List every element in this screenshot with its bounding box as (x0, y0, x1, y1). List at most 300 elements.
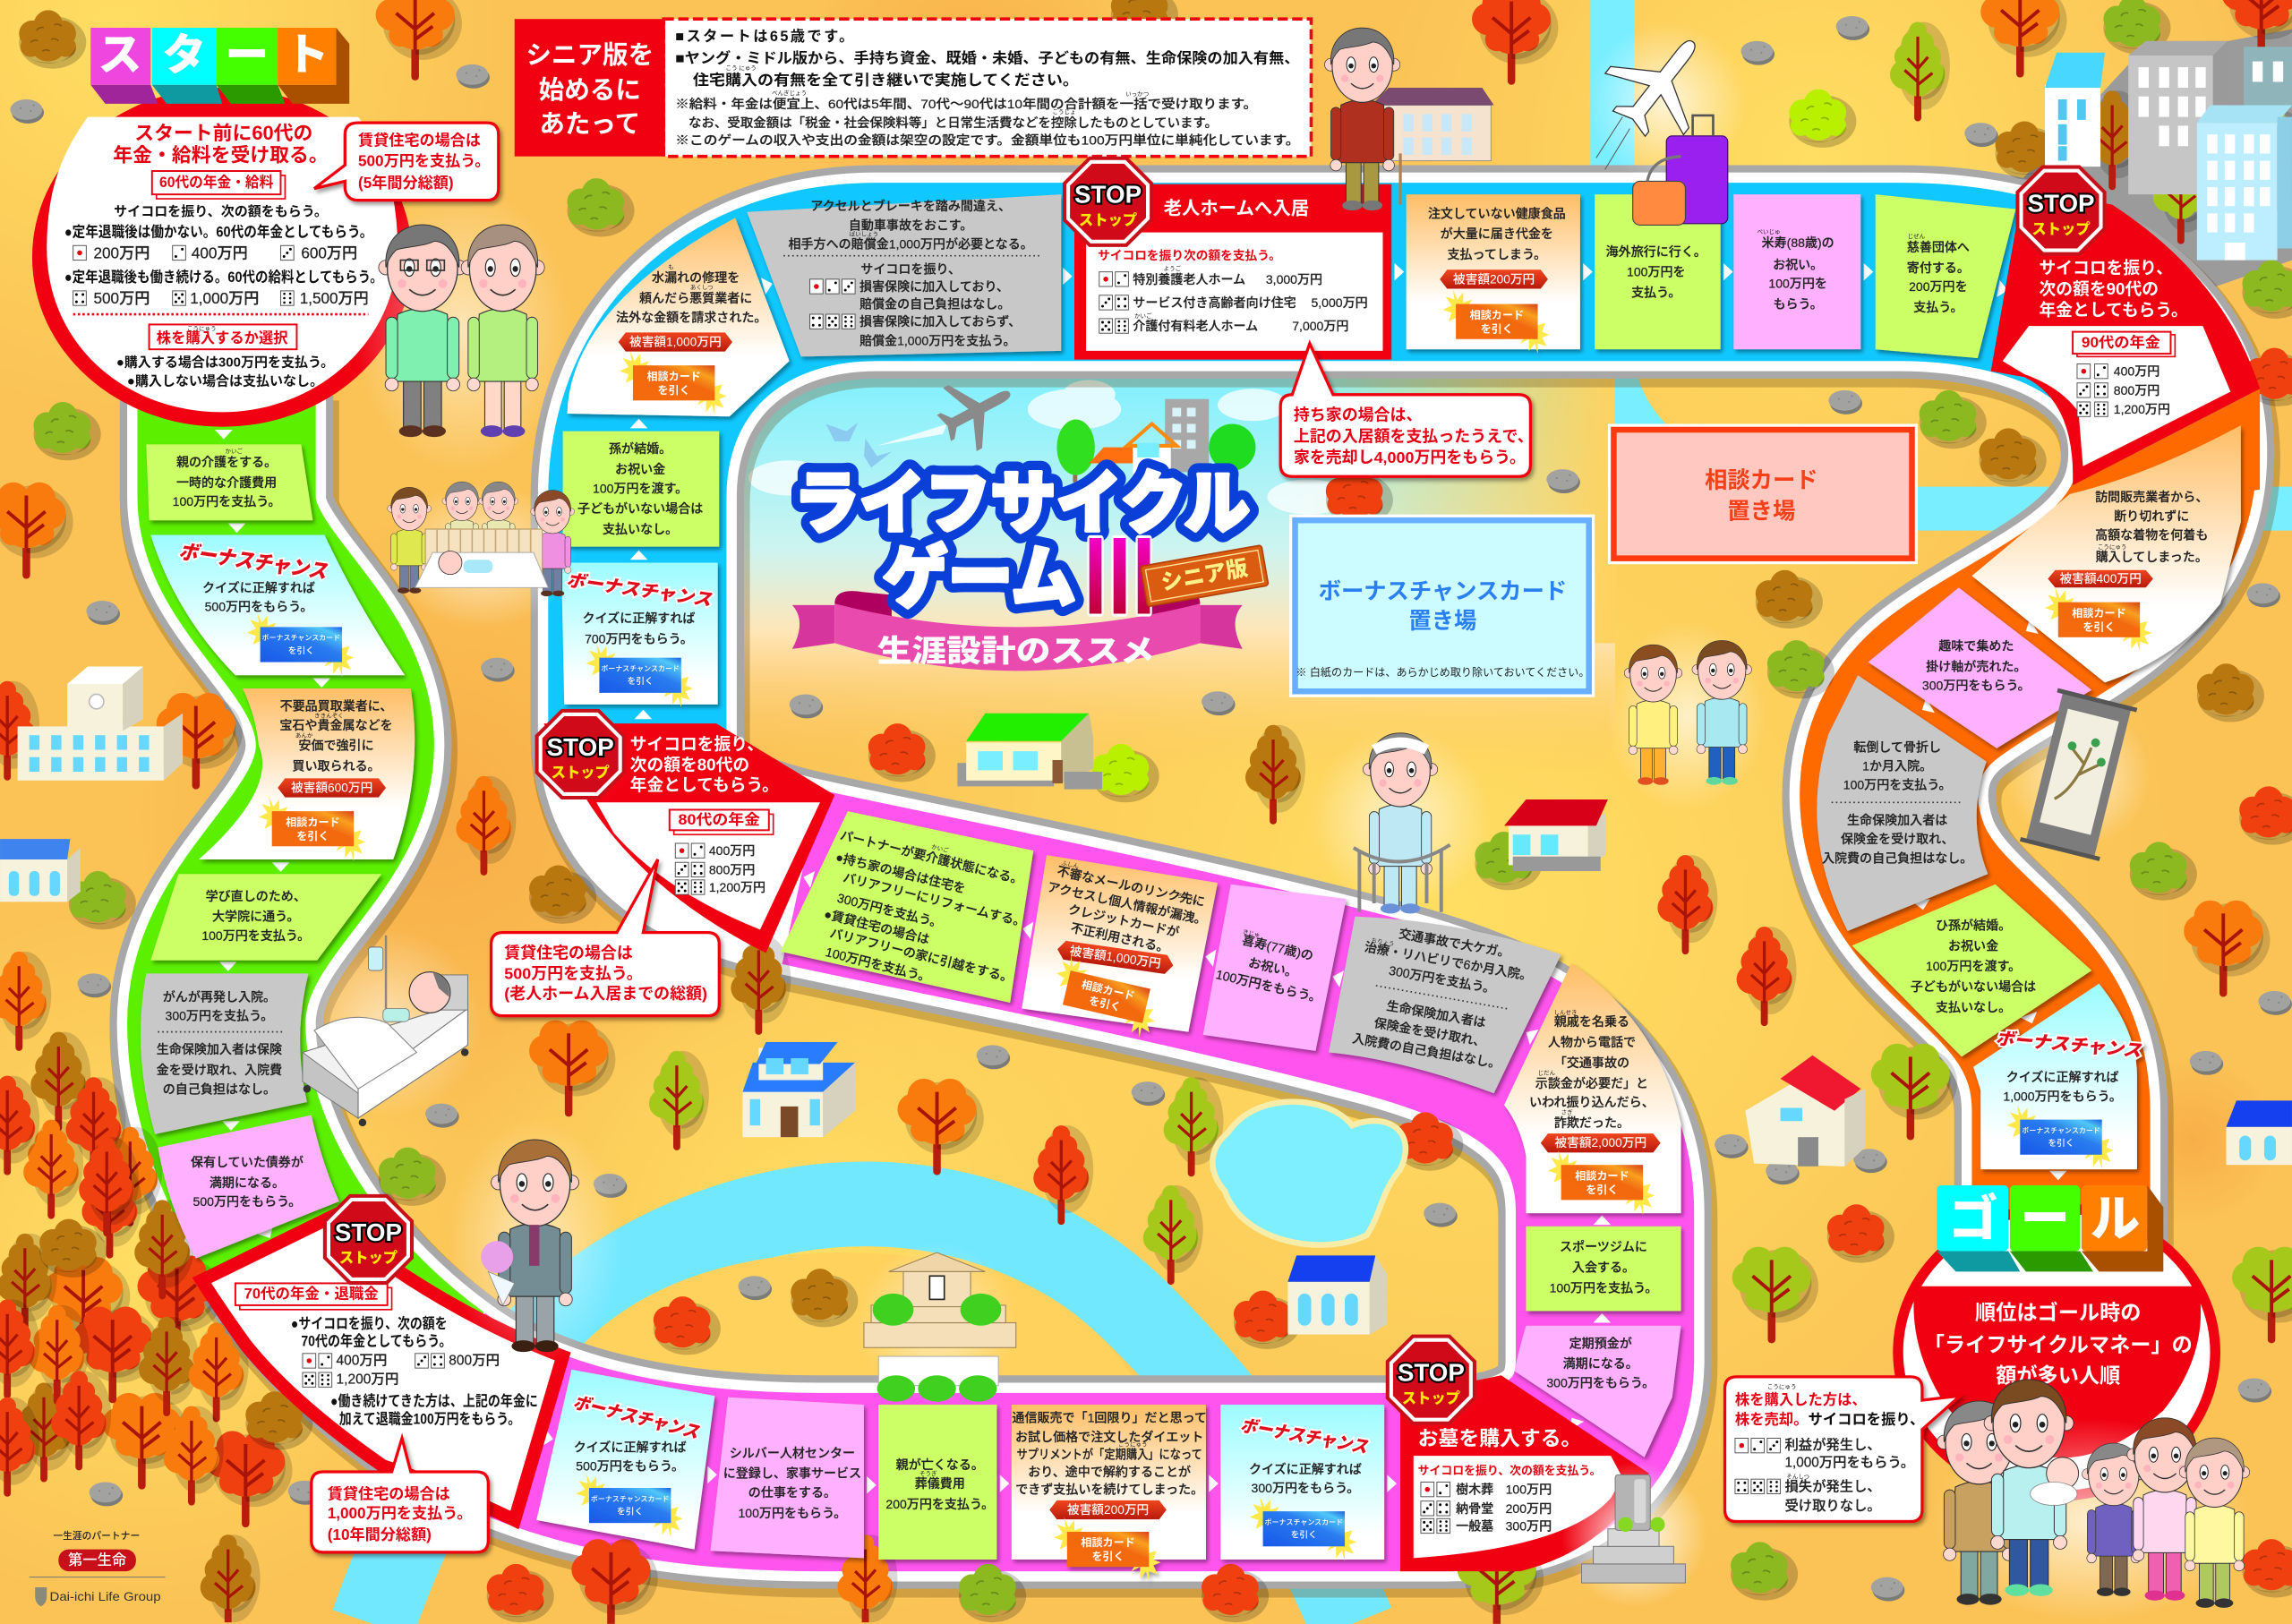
card: を引く (2048, 1137, 2074, 1149)
cell: ボーナスチャンス 300万円: ボーナスチャンス (1239, 1416, 1370, 1457)
sector: お墓を購入する: お墓を購入する。 (1418, 1426, 1581, 1449)
cell: ボーナスチャンス 300万円 (1220, 1405, 1384, 1561)
cell: がん再発: がんが再発し入院。 (163, 989, 276, 1004)
STOP sign: 老人ホーム: STOP (1074, 181, 1142, 209)
sector: 老人ホームへ入居: 5,000万円 (1311, 295, 1368, 310)
cell: 自動車事故: 賠償金の自己負担はなし。 (860, 297, 1010, 312)
STOP sign: 90代 (2015, 165, 2107, 256)
card: 相談カード (1575, 1168, 1629, 1182)
callout: stock sale at goal: 受け取りなし。 (1784, 1498, 1881, 1514)
cell: 交通事故で大ケガ: 治療・リハビリで6か月入院。 (1364, 939, 1534, 983)
heading: 60代の年金・給料 (152, 171, 285, 199)
callout: 80s rental (492, 859, 719, 1016)
character: elderly couple at start (352, 183, 571, 475)
card place: 相談カード: 置き場 (1727, 499, 1795, 524)
cell: ボーナスチャンス 1,000万円: クイズに正解すれば (2006, 1070, 2119, 1084)
cell: 不審なメール: 不審なメールのリンク先に (1056, 864, 1206, 909)
cell: 交通事故で大ケガ: 生命保険加入者は (1386, 998, 1487, 1030)
sector: 90代の年金: 800万円 (2114, 383, 2159, 397)
road band: blue (637, 272, 2168, 746)
character: grave / tomb (1561, 1462, 1707, 1608)
cell: シルバー人材: の仕事をする。 (748, 1485, 836, 1500)
callout: home ownership (1280, 344, 1534, 476)
cell: 趣味の掛け軸: 掛け軸が売れた。 (1926, 659, 2026, 673)
badge: 被害額400万円 (2059, 571, 2142, 585)
cell: 米寿: 100万円を (1768, 277, 1827, 291)
START blocks: タ (162, 31, 206, 80)
cell: 米寿 (1733, 194, 1860, 349)
cell: 学び直し (150, 874, 381, 961)
STOP sign: 90代: STOP (2027, 189, 2095, 217)
central sky panel (739, 365, 1615, 774)
cell: ひ孫が結婚 (1852, 885, 2091, 1056)
cell: 不審なメール: 不正利用される。 (1069, 920, 1171, 955)
icon: luggage (1633, 115, 1728, 225)
card place: ボーナスチャンスカード: ※ 白紙のカードは、あらかじめ取り除いておいてください。 (1296, 665, 1589, 679)
STOP sign: お墓: ストップ (1402, 1389, 1460, 1406)
cell: ひ孫が結婚: お祝い金 (1948, 938, 1998, 953)
start circle: 年金・給料を受け取る。 (113, 144, 329, 167)
card: 相談カードを引く: を引く (296, 830, 329, 842)
cell: 転倒骨折: 100万円を支払う。 (1843, 778, 1952, 792)
start circle: 200万円 (94, 244, 150, 261)
start circle: 1,500万円 (300, 289, 369, 307)
card: を引く (1091, 1551, 1125, 1563)
title art: sky scene (825, 362, 1255, 483)
sector: 90代の年金: サイコロを振り、 (2040, 258, 2173, 277)
furigana readings: かいご (930, 842, 950, 854)
cell: 不審なメール (1022, 855, 1218, 1040)
sector: お墓を購入する: 100万円 (1506, 1483, 1552, 1497)
STOP sign: 老人ホーム: ストップ (1079, 212, 1137, 229)
cell: ひ孫が結婚: ひ孫が結婚。 (1936, 918, 2011, 932)
card: ボーナスチャンスカード (1265, 1518, 1343, 1526)
callout: 80s rental: 賃貸住宅の場合は (504, 943, 633, 962)
callout: stock sale at goal: 利益が発生し、 (1784, 1437, 1881, 1453)
STOP sign: 90代: ストップ (2031, 220, 2091, 237)
cell: パートナーが要介護 (781, 811, 1033, 1003)
cell: ボーナスチャンス 500万円: 500万円をもらう。 (205, 600, 312, 614)
card: ボーナスチャンスカードを引く: ボーナスチャンスカード (262, 634, 340, 642)
sector: 80代の年金: 1,200万円 (709, 880, 765, 894)
furigana readings: ろうえい (1176, 892, 1201, 903)
cell: 孫が結婚 (563, 432, 719, 547)
sector: お墓を購入する: 300万円 (1506, 1518, 1552, 1533)
cell: 不審なメール: クレジットカードが (1067, 902, 1181, 939)
card: 相談カード (1470, 308, 1524, 321)
cell: 米寿: 米寿(88歳)の (1762, 235, 1834, 250)
cell: 健康食品: 注文していない健康食品 (1428, 206, 1566, 220)
sector: 80代の年金 (543, 723, 834, 953)
cell: 不要品買取業者: 宝石や貴金属などを (279, 718, 393, 732)
card: を引く (1586, 1184, 1618, 1196)
notice panel: シニア版を始めるにあたって: 住宅購入の有無を全て引き継いで実施してください。 (693, 72, 1079, 89)
cell: 学び直し: 100万円を支払う。 (201, 928, 310, 943)
character: goal family (1929, 1380, 2251, 1622)
card: 相談カードを引く (259, 797, 365, 861)
notice panel: シニア版を始めるにあたって: ■スタートは65歳です。 (675, 29, 853, 45)
sector: お墓を購入する (1400, 1375, 1649, 1571)
callout: stock sale at goal: 損失が発生し、 (1784, 1479, 1881, 1495)
furigana readings: こうにゅう (2098, 543, 2126, 551)
road: rim (217, 272, 2170, 1488)
sector: お墓を購入する: サイコロを振り、次の額を支払う。 (1418, 1464, 1601, 1477)
furigana readings: あんか (295, 732, 313, 739)
red gable house (1745, 1056, 1865, 1167)
STOP sign: お墓 (1386, 1335, 1476, 1425)
cell: 学び直し: 学び直しのため、 (206, 889, 306, 903)
city buildings top right (2045, 41, 2292, 261)
furigana readings: べんぎじょう (772, 89, 807, 97)
top track cells (1407, 194, 2015, 358)
cell: 転倒骨折: 入院費の自己負担はなし。 (1822, 850, 1972, 865)
cell: ボーナスチャンス 700万円: 700万円をもらう。 (585, 631, 693, 645)
cell: 親戚を名乗る詐欺: 示談金が必要だ」と (1535, 1076, 1648, 1090)
school building (18, 666, 183, 781)
start circle: スタート前に60代の (134, 122, 312, 144)
sector: お墓を購入する: 納骨堂 (1456, 1501, 1493, 1516)
cell: がん再発: 生命保険加入者は保険 (157, 1042, 282, 1056)
notice panel: シニア版を始めるにあたって: あたって (539, 110, 640, 139)
sector: 70代の年金・退職金: 加えて退職金100万円をもらう。 (339, 1410, 520, 1427)
notice panel: シニア版を始めるにあたって (515, 19, 1311, 157)
badge: 被害額1,000万円 (629, 335, 722, 349)
sector: 80代の年金: 800万円 (709, 862, 755, 876)
icon: hanging scroll (1988, 680, 2168, 869)
furigana readings: ちりょう (1371, 936, 1395, 948)
cell: 孫が結婚: 支払いなし。 (603, 522, 678, 536)
cell: 通信販売: お試し価格で注文したダイエット (1015, 1430, 1203, 1444)
cell: 自動車事故: 損害保険に加入しており、 (860, 279, 1009, 294)
cell: がん再発: の自己負担はなし。 (163, 1081, 276, 1096)
furigana readings: こうじょ (1053, 108, 1076, 115)
cell: 定期預金: 300万円をもらう。 (1546, 1375, 1655, 1389)
icon: airplane (1586, 12, 1747, 183)
goal circle: 額が多い人順 (1996, 1363, 2120, 1387)
STOP sign: 70代: ストップ (339, 1250, 398, 1267)
callout: start rental: (5年間分総額) (358, 174, 454, 192)
cell: シルバー人材 (710, 1397, 864, 1558)
sector: 老人ホームへ入居: サービス付き高齢者向け住宅 (1133, 295, 1296, 310)
furigana readings: ききんぞく (314, 712, 344, 719)
STOP sign: 80代: STOP (547, 733, 614, 761)
green roof house (957, 714, 1102, 790)
STOP sign: 80代 (535, 709, 626, 799)
card (2045, 587, 2151, 652)
GOAL blocks: ー (2020, 1192, 2070, 1247)
orange track cells (1817, 425, 2241, 1169)
bottom pink track cells (536, 1370, 1384, 1581)
card (620, 351, 726, 415)
START blocks: ス (98, 31, 141, 80)
card: 相談カード (646, 369, 701, 382)
sector: 老人ホームへ入居: 特別養護老人ホーム (1133, 272, 1245, 286)
cell: 訪問販売: 高額な着物を何着も (2095, 528, 2208, 543)
cell: 転倒骨折: 転倒して骨折し (1853, 739, 1941, 754)
cell: 定期預金: 定期預金が (1569, 1336, 1632, 1350)
callout: home ownership: 上記の入居額を支払ったうえで、 (1294, 427, 1534, 445)
heading: 70代の年金・退職金 (235, 1283, 392, 1310)
cell: がん再発: 金を受け取れ、入院費 (157, 1063, 282, 1077)
road band: green (217, 395, 432, 1384)
character: old man with nursing home (1325, 28, 1494, 210)
character: man with bouquet (448, 1118, 623, 1366)
character: patient in hospital bed (293, 928, 483, 1126)
grey lot for buildings (2023, 30, 2292, 300)
cell: 転倒骨折: 1か月入院。 (1862, 758, 1932, 773)
logo: 第一生命 Dai-ichi Life Group: Dai-ichi Life Group (50, 1589, 161, 1603)
heading: 60代の年金・給料: 60代の年金・給料 (159, 174, 273, 191)
cell: ボーナスチャンス 700万円 (561, 563, 718, 707)
heading: 株を購入するか選択: こうにゅう (187, 325, 217, 332)
cell: 喜寿: お祝い。 (1247, 955, 1299, 980)
cell: 訪問販売 (1971, 425, 2241, 682)
hill inside river (548, 1252, 1148, 1403)
card: を引く (658, 384, 690, 397)
cell: 自動車事故: 自動車事故をおこす。 (849, 218, 972, 232)
cell: ボーナスチャンス 500万円: 500万円をもらう。 (576, 1459, 684, 1474)
cell: 自動車事故: 賠償金1,000万円を支払う。 (860, 333, 1016, 347)
notice panel: シニア版を始めるにあたって: ※このゲームの収入や支出の金額は架空の設定です。金額単位も100万円単位に単純化しています。 (675, 133, 1299, 148)
cell: パートナーが要介護: 300万円を支払う。 (836, 891, 945, 930)
cell: 親が亡くなる (878, 1405, 996, 1560)
cell: 喜寿: 喜寿(77歳)の (1241, 933, 1314, 962)
card: 相談カード (1081, 978, 1136, 1003)
cell: 親戚を名乗る詐欺: 親戚を名乗る (1554, 1014, 1629, 1029)
card (586, 643, 693, 707)
numeral III: Ⅲ (1083, 524, 1156, 635)
cell: 自動車事故: アクセルとブレーキを踏み間違え、 (810, 199, 1011, 213)
cell: シルバー人材: に登録し、家事サービス (723, 1466, 861, 1481)
notice panel: シニア版を始めるにあたって: なお、受取金額は「税金・社会保険料等」と日常生活費などを控除したものとしています。 (688, 115, 1218, 130)
badge (1056, 940, 1175, 975)
card: を引く (2082, 620, 2116, 633)
green track cells (141, 444, 415, 1259)
card place: ボーナスチャンスカード (1289, 515, 1595, 697)
STOP sign: 70代: STOP (335, 1218, 402, 1246)
sector: 80代の年金: 年金としてもらう。 (630, 774, 779, 794)
card: ボーナスチャンスカードを引く: を引く (288, 645, 314, 656)
START blocks (90, 28, 349, 104)
callout: 80s rental: (老人ホーム入居までの総額) (504, 985, 707, 1003)
cell: 交通事故で大ケガ: 入院費の自己負担はなし。 (1351, 1030, 1502, 1071)
cell: ボーナスチャンス 500万円: クイズに正解すれば (202, 580, 315, 594)
heading: 70代の年金・退職金: 70代の年金・退職金 (244, 1286, 380, 1303)
badge (2048, 570, 2153, 587)
cell: 保有債券 (158, 1115, 339, 1259)
STOP sign: お墓: STOP (1398, 1359, 1465, 1387)
cell: ボーナスチャンス 500万円: クイズに正解すれば (574, 1440, 687, 1454)
sector: 老人ホームへ入居: 3,000万円 (1266, 272, 1322, 286)
character: elder with walker (1310, 728, 1491, 913)
callout: 80s rental: 500万円を支払う。 (504, 964, 643, 982)
cell: 保有債券: 500万円をもらう。 (193, 1194, 301, 1209)
start circle: ●定年退職後は働かない。60代の年金としてもらう。 (64, 224, 372, 241)
cell: 交通事故で大ケガ (1329, 917, 1561, 1093)
cell: 趣味の掛け軸 (1869, 587, 2091, 748)
houses (0, 666, 2292, 1335)
cell: 自動車事故: 損害保険に加入しておらず、 (860, 314, 1021, 329)
furigana readings (225, 64, 2126, 1477)
callout: stock sale at goal: 株を購入した方は、 (1735, 1391, 1867, 1408)
small left house (0, 839, 81, 902)
cell: 通信販売 (1012, 1405, 1207, 1581)
cell: 通信販売: 通信販売で「1回限り」だと思って (1012, 1411, 1207, 1425)
goal circle (1893, 1185, 2220, 1501)
cell: パートナーが要介護: ●賃貸住宅の場合は (823, 907, 931, 946)
callout: stock sale at goal: 株を売却。サイコロを振り、 (1735, 1411, 1924, 1428)
furigana readings: じぜん (1908, 233, 1926, 240)
card: を引く (1088, 995, 1122, 1013)
blue roof church (1287, 1255, 1387, 1335)
STOP sign: 70代 (323, 1194, 414, 1285)
sector: 老人ホームへ入居: 老人ホームへ入居 (1164, 198, 1309, 218)
cell: ひ孫が結婚: 支払いなし。 (1936, 1000, 2011, 1014)
heading: 90代の年金 (2073, 332, 2175, 356)
furigana readings: ばいしょう (850, 230, 878, 238)
sector: 90代の年金: 400万円 (2114, 364, 2159, 379)
title: ライフサイクルゲームIII (792, 466, 1269, 671)
senior edition tag: シニア版 (1159, 555, 1250, 595)
character: funeral shrine altar (857, 1243, 1017, 1403)
cell: ボーナスチャンス 1,000万円: 1,000万円をもらう。 (2003, 1089, 2122, 1103)
cell: 孫が結婚: 子どもがいない場合は (577, 501, 703, 516)
cell: 通信販売: サプリメントが「定期購入」になって (1017, 1447, 1202, 1461)
heading: 80代の年金 (670, 809, 774, 834)
cell: スポーツジム: 入会する。 (1572, 1260, 1635, 1274)
sector: お墓を購入する: 樹木葬 (1456, 1483, 1493, 1497)
callout: stock sale at goal: こうにゅう (1767, 1383, 1796, 1390)
cell: 親戚を名乗る詐欺 (1504, 963, 1681, 1215)
cell: 健康食品: が大量に届き代金を (1441, 227, 1553, 241)
badge (1049, 1500, 1167, 1519)
STOP sign: 80代: ストップ (552, 765, 610, 782)
notice panel: シニア版を始めるにあたって: ■ヤング・ミドル版から、手持ち資金、既婚・未婚、子どもの有無、生命保険の加入有無、 (675, 49, 1299, 66)
cell: ボーナスチャンス 500万円 (536, 1370, 714, 1550)
sector: 90代の年金: 次の額を90代の (2040, 279, 2159, 298)
cell: 親が亡くなる: 200万円を支払う。 (885, 1497, 994, 1511)
cell: ひ孫が結婚: 100万円を渡す。 (1926, 959, 2021, 973)
logo: 第一生命 Dai-ichi Life Group: 第一生命 (68, 1552, 127, 1568)
cell: ボーナスチャンス 1,000万円: ボーナスチャンス (1995, 1029, 2143, 1062)
furigana readings: しんせき (1554, 1009, 1578, 1016)
sector: お墓を購入する: 200万円 (1506, 1501, 1552, 1516)
cell: ボーナスチャンス 500万円 (150, 535, 405, 677)
furigana readings: ようご (1164, 264, 1182, 272)
card: を引く (617, 1505, 643, 1517)
cell: パートナーが要介護: 100万円を支払う。 (825, 944, 933, 985)
cell: ボーナスチャンス 300万円: 300万円をもらう。 (1252, 1481, 1359, 1495)
cell: 自動車事故: 相手方への賠償金1,000万円が必要となる。 (789, 237, 1033, 252)
start circle: 1,000万円 (190, 289, 259, 307)
cell: 自動車事故 (747, 194, 1061, 356)
red roof house (1504, 799, 1608, 871)
cell: パートナーが要介護: パートナーが要介護状態になる。 (839, 827, 1025, 887)
badge (1541, 1133, 1661, 1152)
sector: 70代の年金・退職金: ●サイコロを振り、次の額を (291, 1316, 448, 1332)
GOAL blocks (1937, 1185, 2163, 1271)
furigana readings: も (668, 263, 674, 270)
cell: 通信販売: できず支払いを続けてしまった。 (1015, 1483, 1203, 1497)
notice panel: シニア版を始めるにあたって: シニア版を (526, 41, 654, 70)
cell: ひ孫が結婚: 子どもがいない場合は (1911, 979, 2036, 994)
cell: がん再発: 300万円を支払う。 (166, 1009, 273, 1023)
furigana readings: かいご (225, 447, 243, 455)
cell: 親戚を名乗る詐欺: 人物から電話で (1548, 1035, 1636, 1049)
sector: 70代の年金・退職金: 800万円 (449, 1353, 500, 1368)
goal circle: 順位はゴール時の (1975, 1301, 2141, 1324)
cell: スポーツジム: スポーツジムに (1560, 1240, 1647, 1254)
cell: ボーナスチャンス 700万円: ボーナスチャンス (565, 570, 714, 611)
cell: 親が亡くなる: 葬儀費用 (915, 1476, 965, 1491)
card: 相談カード (2072, 606, 2126, 620)
card: 相談カード (1081, 1535, 1135, 1549)
cell: 慈善団体: 支払う。 (1913, 300, 1963, 314)
heading: 80代の年金: 80代の年金 (679, 811, 761, 828)
cell: 趣味の掛け軸: 趣味で集めた (1938, 639, 2014, 654)
blue track cells (561, 194, 1061, 707)
card (1548, 1150, 1655, 1215)
card: ボーナスチャンスカード (591, 1495, 669, 1503)
furigana readings: さぎ (1561, 1108, 1573, 1116)
sector: お墓を購入する: 一般墓 (1456, 1518, 1493, 1533)
cell: 転倒骨折 (1817, 675, 1988, 931)
card place: 相談カード: 相談カード (1705, 468, 1818, 493)
cell: 水漏れの修理: 水漏れの修理を (652, 270, 740, 285)
cell: 訪問販売: 訪問販売業者から、 (2095, 490, 2208, 504)
start circle: 500万円 (94, 289, 150, 307)
sector: 老人ホームへ入居: 介護付有料老人ホーム (1133, 319, 1258, 333)
sector: 70代の年金・退職金: ●働き続けてきた方は、上記の年金に (330, 1393, 538, 1410)
GOAL blocks: ゴ (1948, 1192, 1998, 1247)
cell: 交通事故で大ケガ: 交通事故で大ケガ。 (1398, 927, 1511, 960)
furigana readings: こう にゅう (726, 64, 757, 72)
heading: 株を購入するか選択: 株を購入するか選択 (157, 330, 288, 346)
right pink track cells (781, 811, 1681, 1457)
furigana readings: こうにゅう (1118, 1440, 1148, 1448)
title line 2: ゲーム (883, 541, 1076, 617)
badge: 被害額200万円 (1067, 1502, 1149, 1517)
card (1442, 289, 1550, 354)
cell: 趣味の掛け軸: 300万円をもらう。 (1922, 679, 2031, 693)
callout: 70s rental: 賃貸住宅の場合は (328, 1485, 450, 1503)
goal circle: 「ライフサイクルマネー」の (1924, 1333, 2193, 1356)
card: 相談カードを引く: 相談カード (286, 815, 340, 828)
cell: 米寿: もらう。 (1773, 297, 1823, 312)
callout: home ownership: 持ち家の場合は、 (1294, 406, 1422, 424)
cell: 健康食品: 支払ってしまう。 (1447, 247, 1546, 261)
cell: 転倒骨折: 生命保険加入者は (1847, 813, 1947, 827)
START blocks: ー (225, 31, 269, 80)
direction arrows on the track (215, 263, 2179, 1494)
callout: stock sale at goal: 1,000万円をもらう。 (1784, 1456, 1914, 1471)
callout: start rental (314, 123, 499, 201)
logo: 第一生命 Dai-ichi Life Group (30, 1530, 166, 1606)
start circle: ●定年退職後も働き続ける。60代の給料としてもらう。 (64, 269, 383, 286)
blue roof two storey house (742, 1042, 855, 1137)
sector: 老人ホームへ入居: 7,000万円 (1292, 319, 1348, 333)
STOP sign: 老人ホーム (1063, 157, 1153, 247)
heading: 90代の年金: 90代の年金 (2082, 334, 2161, 351)
cell: 慈善団体: 寄付する。 (1907, 261, 1970, 275)
cell: 親の介護: 一時的な介護費用 (176, 475, 277, 490)
cell: ボーナスチャンス 1,000万円 (1973, 984, 2143, 1169)
GOAL blocks: ル (2091, 1192, 2140, 1247)
card (1047, 953, 1165, 1040)
card: ボーナスチャンスカードを引く (247, 612, 354, 677)
pond (1212, 1102, 1406, 1245)
cell: シルバー人材: シルバー人材センター (730, 1446, 855, 1460)
